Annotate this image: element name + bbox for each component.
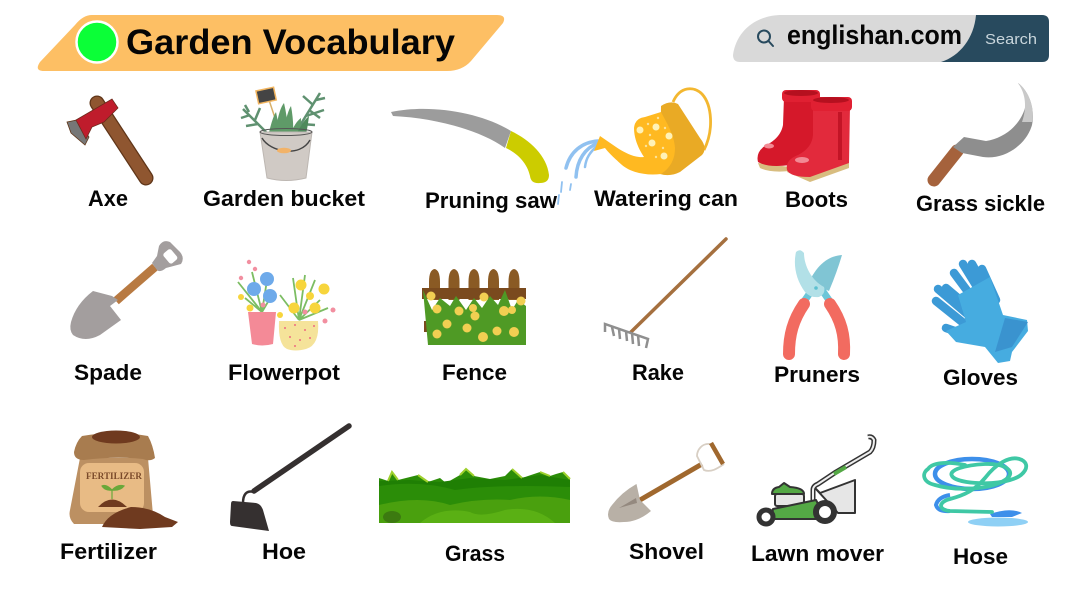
label: Pruning saw <box>425 188 558 213</box>
item: pruners <box>774 250 860 387</box>
icon: axe <box>67 99 146 178</box>
label: Grass sickle <box>916 191 1045 216</box>
item: axe <box>67 99 146 211</box>
label: Fence <box>442 360 507 385</box>
label: Garden bucket <box>203 186 366 211</box>
icon: sickle <box>934 83 1033 180</box>
item: lawn mower <box>751 437 884 566</box>
label: Hoe <box>262 539 306 564</box>
item: fertilizer <box>60 430 178 564</box>
search button label: Search <box>985 31 1037 48</box>
icon: grass strip <box>379 469 570 523</box>
icon: garden hose <box>924 458 1028 526</box>
item: fence <box>422 269 526 385</box>
item: grass sickle <box>916 83 1045 216</box>
icon: blue gloves <box>936 264 1028 363</box>
icon: rain boots <box>758 90 852 182</box>
icon: rake <box>605 239 726 348</box>
icon: green bullet <box>76 22 118 62</box>
item: rake <box>605 239 726 385</box>
icon: fertilizer bag: FERTILIZER <box>86 471 143 481</box>
icon: saw <box>391 109 549 183</box>
item: pruning saw <box>391 109 558 213</box>
icon: pruners <box>789 250 844 354</box>
label: Boots <box>785 187 848 212</box>
item: flowerpot <box>228 260 341 385</box>
item: spade <box>70 241 183 385</box>
label: Shovel <box>629 539 704 564</box>
search text: englishan.com <box>787 20 962 50</box>
label: Watering can <box>594 186 738 211</box>
item: grass <box>379 469 570 566</box>
label: Grass <box>445 541 505 566</box>
item: shovel <box>608 443 724 564</box>
icon: lawn mower <box>759 437 874 524</box>
label: Fertilizer <box>60 539 157 564</box>
label: Spade <box>74 360 142 385</box>
icon: bucket with plants <box>241 87 325 180</box>
item: gloves <box>936 264 1028 390</box>
label: Hose <box>953 544 1008 569</box>
icon: hoe <box>230 426 349 531</box>
title: Garden Vocabulary <box>126 23 456 62</box>
icon: watering can <box>558 89 711 204</box>
item: hoe <box>230 426 349 564</box>
label: Gloves <box>943 365 1018 390</box>
icon: shovel <box>608 443 724 522</box>
label: Lawn mover <box>751 541 884 566</box>
search bar <box>733 15 1049 62</box>
label: Pruners <box>774 362 860 387</box>
item: watering can <box>558 89 738 211</box>
icon: magnifier <box>758 30 773 46</box>
label: Rake <box>632 360 684 385</box>
item: garden bucket <box>203 87 366 211</box>
label: Flowerpot <box>228 360 341 385</box>
label: Axe <box>88 186 128 211</box>
icon: two flowerpots <box>238 260 336 350</box>
title banner <box>38 15 504 71</box>
item: boots <box>758 90 852 212</box>
icon: spade <box>70 241 183 339</box>
icon: fence with flowers <box>422 269 526 345</box>
item: hose <box>924 458 1028 569</box>
